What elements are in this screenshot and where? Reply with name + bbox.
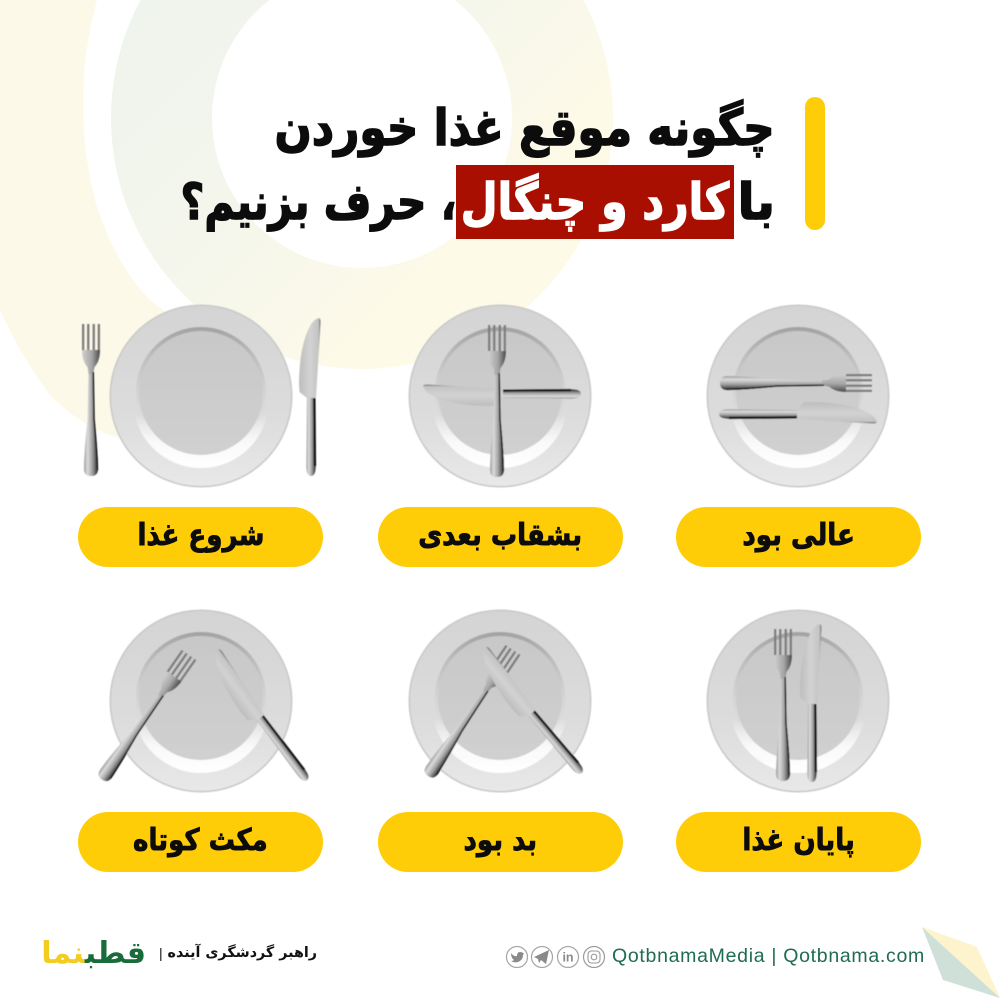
plate: it was bad: [408, 610, 592, 792]
footer social handles: QotbnamaMedia | Qotbnama.com: [612, 945, 925, 967]
icon: twitter: [506, 946, 528, 968]
plate: short pause: [94, 610, 315, 792]
icon: linkedin: [558, 946, 578, 968]
label: short pause: مکث کوتاه: [133, 822, 268, 858]
background rings: [0, 0, 613, 441]
plate: end of meal: [706, 610, 890, 792]
plate: next course: [408, 304, 592, 488]
label: it was bad: بد بود: [464, 822, 537, 858]
icon: telegram: [532, 946, 552, 968]
plate: it was excellent: [706, 304, 890, 488]
title highlight box: [456, 165, 734, 239]
icon: linkedin: in: [562, 950, 574, 964]
label: short pause: [78, 812, 323, 872]
label: it was excellent: عالی بود: [742, 518, 855, 552]
decorative kite: [922, 927, 1000, 998]
label: end of meal: پایان غذا: [742, 822, 855, 858]
label: next course: بشقاب بعدی: [419, 518, 582, 552]
label: it was bad: [378, 812, 623, 872]
label: next course: [378, 507, 623, 567]
title line 2: with: با: [737, 173, 775, 231]
footer logo: قطبنما: [41, 936, 146, 971]
plate: start of meal: [82, 304, 321, 488]
footer separator: |: [159, 945, 163, 961]
footer tagline: راهبر گردشگری آینده: [168, 945, 317, 961]
label: end of meal: [676, 812, 921, 872]
label: start of meal: [78, 507, 323, 567]
label: it was excellent: [676, 507, 921, 567]
title line 1: چگونه موقع غذا خوردن: [275, 99, 775, 157]
title line 2: remainder: ، حرف بزنیم؟: [180, 173, 456, 231]
title line 2: highlighted words: کارد و چنگال: [461, 173, 729, 231]
label: start of meal: شروع غذا: [137, 518, 264, 552]
title accent bar: [805, 97, 825, 230]
icon: instagram: [584, 946, 604, 968]
